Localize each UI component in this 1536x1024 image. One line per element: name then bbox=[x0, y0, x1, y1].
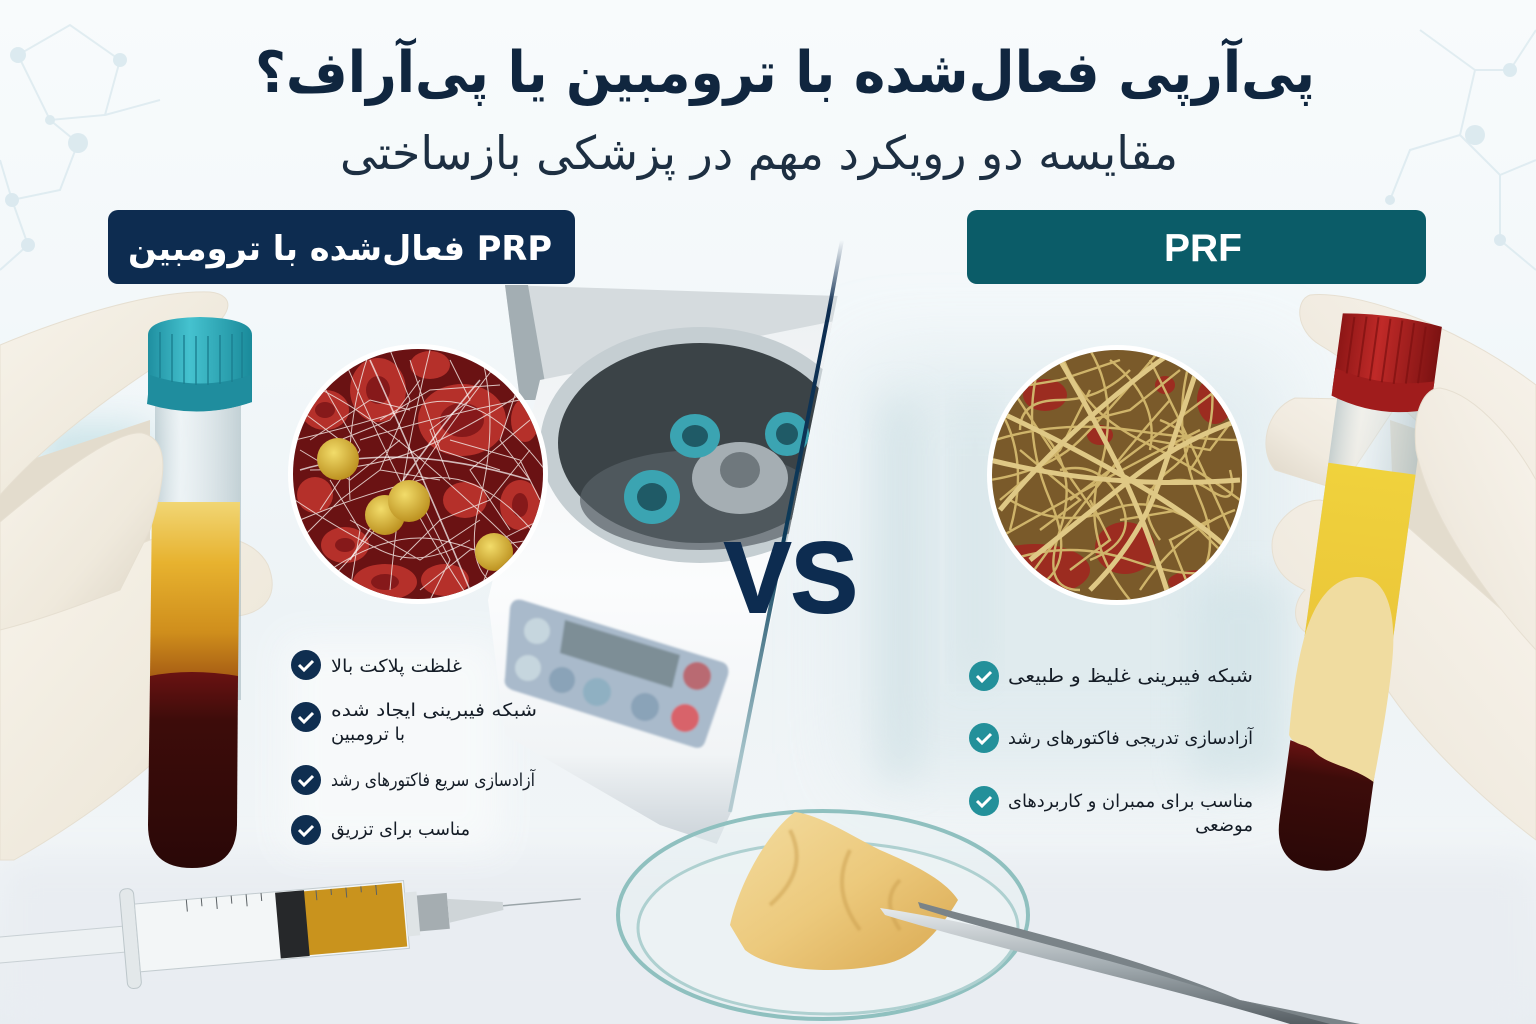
checklist: PRP bbox=[291, 650, 537, 845]
check: fibrin network: شبکه فیبرینی ایجاد شده bbox=[331, 700, 537, 721]
check: gradual release: آزادسازی تدریجی فاکتورهای رشد bbox=[1008, 726, 1254, 749]
PRP test tube bbox=[147, 317, 252, 868]
check: fibrin network bbox=[291, 700, 537, 745]
check: gradual release bbox=[969, 723, 1254, 753]
panel: PRF heading bbox=[967, 210, 1426, 284]
title: پی‌آرپی فعال‌شده با ترومبین یا پی‌آراف؟ bbox=[255, 37, 1315, 106]
panel: PRF heading: PRF bbox=[1164, 227, 1242, 270]
fibrin clot bbox=[1283, 570, 1404, 782]
panel: PRP heading bbox=[108, 210, 575, 284]
check: fast release bbox=[291, 765, 536, 795]
check: membranes and topical: موضعی bbox=[1195, 815, 1253, 836]
left gloved hand, front fingers bbox=[0, 433, 163, 630]
micrograph: thrombin-activated PRP bbox=[288, 344, 548, 604]
subtitle: مقایسه دو رویکرد مهم در پزشکی بازساختی bbox=[340, 126, 1178, 181]
forceps bbox=[880, 902, 1360, 1024]
check: dense fibrin network bbox=[969, 661, 1253, 691]
VS label: VS bbox=[724, 522, 858, 634]
micrograph: PRF fibrin bbox=[980, 345, 1247, 605]
check: suitable for injection bbox=[291, 815, 470, 845]
molecule pattern: top left bbox=[0, 25, 160, 270]
centrifuge control panel bbox=[505, 600, 728, 748]
centre divider bbox=[730, 240, 842, 812]
check: membranes and topical bbox=[969, 786, 1253, 836]
check: dense fibrin network: شبکه فیبرینی غلیظ و طبیعی bbox=[1008, 666, 1253, 687]
check: membranes and topical: مناسب برای ممبران و کاربردهای bbox=[1008, 791, 1253, 812]
check: fast release: آزادسازی سریع فاکتورهای رشد bbox=[331, 768, 536, 791]
centrifuge bowl bbox=[541, 327, 822, 563]
PRF clot bbox=[730, 812, 958, 970]
molecule pattern: top right bbox=[1385, 30, 1536, 270]
check: fibrin network: با ترومبین bbox=[331, 724, 405, 745]
syringe bbox=[0, 849, 585, 1001]
right gloved hand, back bbox=[1266, 294, 1536, 840]
check: high platelet concentration bbox=[291, 650, 462, 680]
panel: PRP heading: PRP فعال‌شده با ترومبین bbox=[128, 229, 552, 269]
checklist: PRF bbox=[969, 661, 1254, 836]
centrifuge bbox=[488, 285, 860, 850]
soft glow behind PRP list bbox=[285, 640, 500, 850]
left gloved hand, back bbox=[0, 292, 272, 860]
check: high platelet concentration: غلظت پلاکت بالا bbox=[331, 656, 462, 677]
check: suitable for injection: مناسب برای تزریق bbox=[331, 819, 470, 840]
right gloved hand, front thumb bbox=[1415, 388, 1536, 650]
petri dish bbox=[618, 811, 1028, 1019]
PRF test tube bbox=[1267, 310, 1442, 877]
